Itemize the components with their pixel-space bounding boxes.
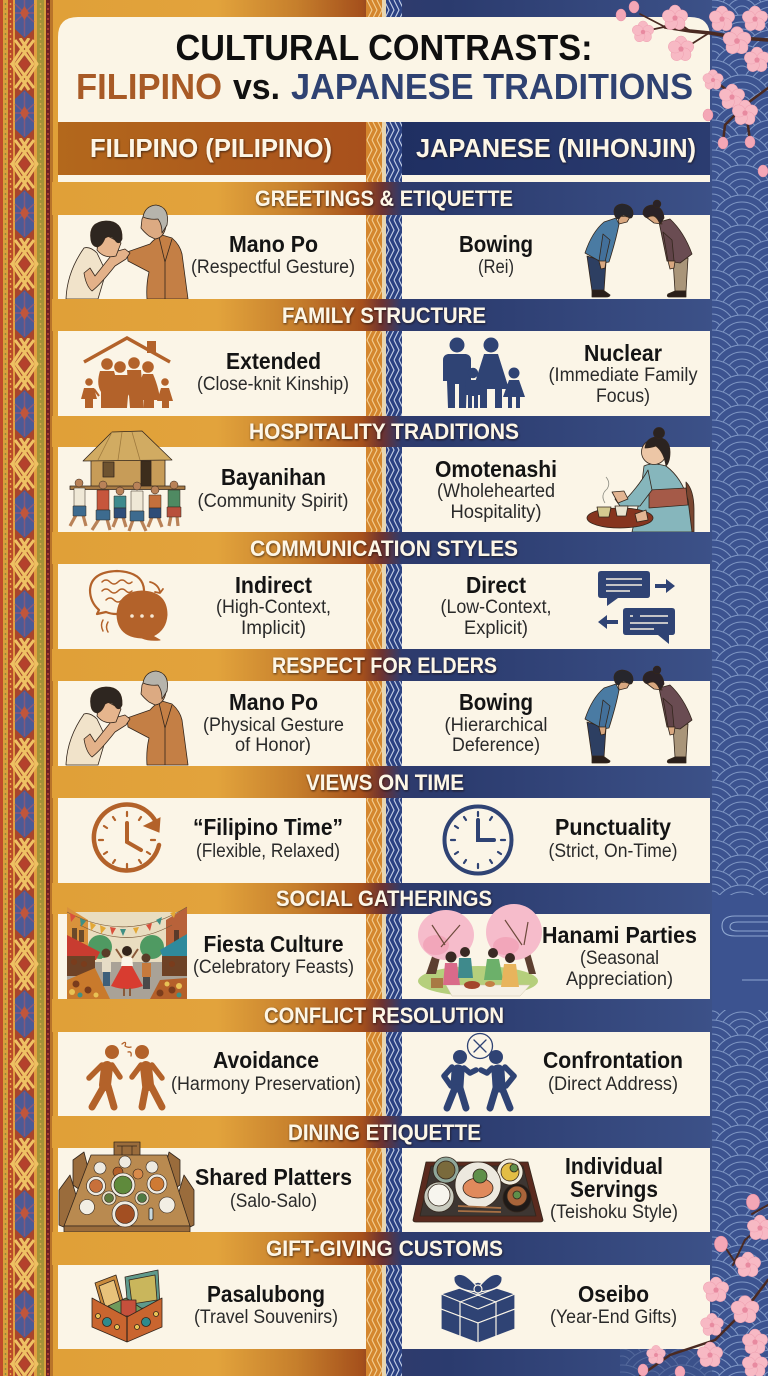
panel: dining etiquette: (Salo-Salo)	[230, 1191, 317, 1212]
panel: social gatherings: SOCIAL GATHERINGS	[276, 886, 492, 911]
panel: dining etiquette: Servings	[570, 1176, 658, 1202]
panel: dining etiquette: Shared Platters	[195, 1164, 352, 1190]
panel: respect for elders: of Honor)	[235, 735, 311, 756]
panel: hospitality traditions: Bayanihan	[221, 464, 326, 490]
title panel	[58, 17, 710, 122]
panel: greetings and etiquette: Bowing	[459, 231, 533, 257]
panel: greetings and etiquette: (Respectful Gesture)	[191, 257, 355, 278]
panel: communication styles: Direct	[466, 572, 526, 598]
icon: hanami picnic	[418, 904, 542, 996]
icon: bowing pair	[585, 666, 692, 763]
panel: family structure: (Close-knit Kinship)	[197, 374, 349, 395]
icon: flexible clock	[94, 804, 160, 870]
panel: social gatherings: (Celebratory Feasts)	[193, 957, 354, 978]
decoration: cherry blossoms bottom right	[638, 1194, 768, 1376]
panel: respect for elders	[52, 649, 712, 766]
panel: views on time	[52, 766, 712, 883]
panel: conflict resolution: CONFLICT RESOLUTION	[264, 1003, 504, 1028]
panel: views on time: (Flexible, Relaxed)	[196, 841, 340, 862]
panel: respect for elders: (Hierarchical	[444, 715, 548, 736]
panel: social gatherings: Fiesta Culture	[204, 931, 344, 957]
panel: conflict resolution	[52, 999, 712, 1116]
panel: hospitality traditions: HOSPITALITY TRADITIONS	[249, 419, 519, 444]
panel: communication styles	[52, 532, 712, 649]
panel: conflict resolution: Avoidance	[213, 1047, 319, 1073]
panel: family structure: Focus)	[596, 386, 650, 407]
panel: gift-giving customs: Pasalubong	[207, 1281, 325, 1307]
panel: family structure: FAMILY STRUCTURE	[282, 303, 486, 328]
panel: greetings and etiquette: Mano Po	[229, 231, 318, 257]
panel: gift-giving customs	[52, 1232, 712, 1349]
panel: communication styles: (High-Context,	[216, 597, 331, 618]
panel: respect for elders: Deference)	[452, 735, 540, 756]
panel: gift-giving customs: (Travel Souvenirs)	[194, 1307, 338, 1328]
panel: dining etiquette: (Teishoku Style)	[550, 1202, 678, 1223]
icon: mano po gesture	[66, 671, 188, 765]
decoration: cherry blossoms top right	[616, 1, 768, 177]
icon: teishoku tray	[413, 1157, 543, 1222]
panel: greetings and etiquette: GREETINGS & ETIQUETTE	[255, 186, 513, 211]
icon: bayanihan house moving	[70, 431, 185, 531]
icon: bowing pair	[585, 200, 692, 297]
panel: respect for elders: Mano Po	[229, 689, 318, 715]
icon: fiesta street scene	[67, 907, 187, 999]
panel: dining etiquette	[52, 1116, 712, 1232]
panel: dining etiquette: Individual	[565, 1153, 663, 1179]
icon: shared platters table	[59, 1142, 194, 1232]
panel: communication styles: (Low-Context,	[440, 597, 552, 618]
title panel: vs.	[233, 66, 280, 107]
panel: views on time: “Filipino Time”	[193, 814, 343, 840]
panel: family structure: Nuclear	[584, 340, 662, 366]
panel: conflict resolution: Confrontation	[543, 1047, 683, 1073]
title panel: FILIPINO	[76, 66, 222, 107]
panel: conflict resolution: (Harmony Preservation)	[171, 1074, 361, 1095]
panel: respect for elders: Bowing	[459, 689, 533, 715]
panel: family structure: (Immediate Family	[548, 365, 698, 386]
panel: respect for elders: (Physical Gesture	[203, 715, 344, 736]
icon: indirect speech bubbles	[90, 571, 167, 640]
column headers: FILIPINO (PILIPINO)	[90, 133, 332, 163]
icon: pasalubong box	[92, 1270, 162, 1342]
panel: family structure: Extended	[226, 348, 321, 374]
column headers: JAPANESE (NIHONJIN)	[416, 133, 696, 163]
title panel: CULTURAL CONTRASTS:	[176, 27, 592, 68]
panel: social gatherings: (Seasonal	[580, 948, 659, 969]
panel: social gatherings	[52, 883, 712, 999]
icon: avoidance figures	[89, 1042, 162, 1107]
panel: social gatherings: Appreciation)	[566, 969, 673, 990]
panel: communication styles: Indirect	[235, 572, 312, 598]
title panel: JAPANESE TRADITIONS	[291, 66, 693, 107]
panel: views on time: Punctuality	[555, 814, 671, 840]
panel: hospitality traditions: (Community Spirit)	[198, 491, 348, 512]
panel: hospitality traditions: Omotenashi	[435, 456, 557, 482]
panel: dining etiquette: DINING ETIQUETTE	[288, 1120, 481, 1145]
panel: hospitality traditions: Hospitality)	[450, 502, 542, 523]
panel: social gatherings: Hanami Parties	[542, 922, 697, 948]
panel: communication styles: Implicit)	[241, 618, 306, 639]
icon: nuclear family	[443, 338, 525, 408]
panel: family structure	[52, 299, 712, 416]
panel: communication styles: COMMUNICATION STYLES	[250, 536, 518, 561]
panel: greetings and etiquette: (Rei)	[478, 257, 514, 278]
panel: gift-giving customs: (Year-End Gifts)	[550, 1307, 677, 1328]
panel: greetings and etiquette	[52, 182, 712, 299]
panel: views on time: VIEWS ON TIME	[306, 770, 464, 795]
column headers	[58, 122, 710, 182]
panel: gift-giving customs: GIFT-GIVING CUSTOMS	[266, 1236, 503, 1261]
panel: gift-giving customs: Oseibo	[578, 1281, 649, 1307]
icon: strict clock	[444, 806, 512, 874]
icon: confrontation figures	[444, 1034, 514, 1108]
panel: hospitality traditions: (Wholehearted	[437, 481, 555, 502]
panel: communication styles: Explicit)	[464, 618, 528, 639]
icon: wrapped gift	[441, 1274, 515, 1343]
icon: direct speech bubbles	[598, 571, 675, 644]
icon: mano po gesture	[66, 205, 188, 299]
panel: respect for elders: RESPECT FOR ELDERS	[272, 653, 497, 678]
panel: conflict resolution: (Direct Address)	[548, 1074, 678, 1095]
panel: hospitality traditions	[52, 416, 712, 532]
panel: views on time: (Strict, On-Time)	[548, 841, 678, 862]
icon: extended family house	[81, 338, 173, 408]
icon: woman serving tea	[587, 428, 694, 532]
